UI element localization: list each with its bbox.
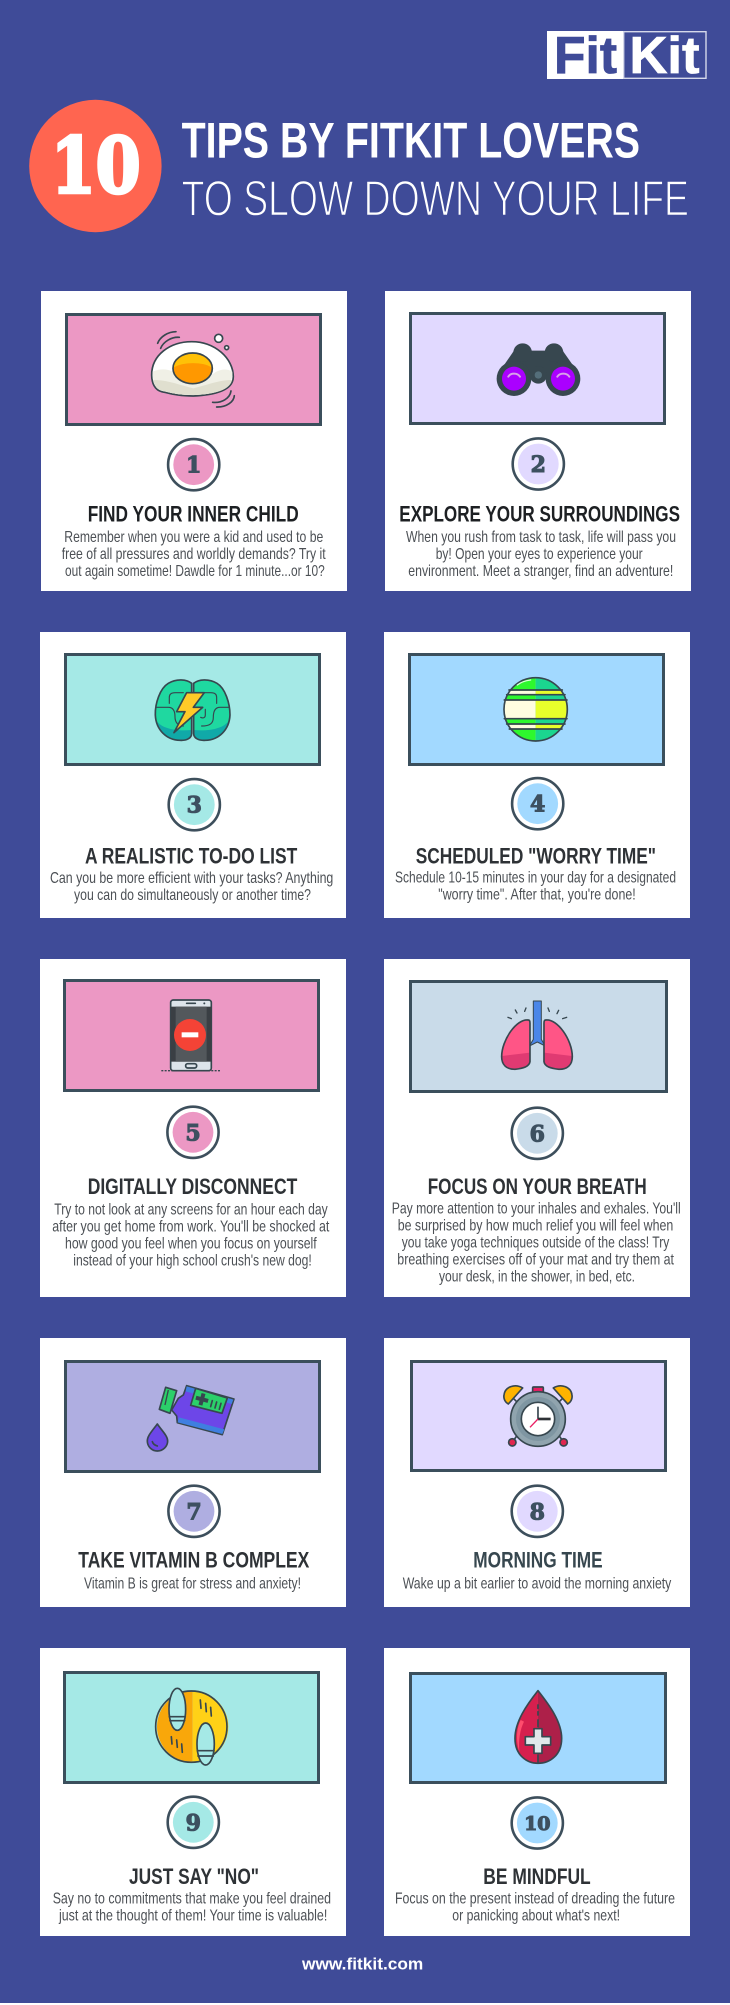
body text xyxy=(395,1890,675,1924)
badge: number 10: 10 xyxy=(51,122,141,212)
badge: number 10 xyxy=(29,100,162,232)
heading: BE MINDFUL xyxy=(483,1864,591,1889)
number badge 5 xyxy=(167,1107,219,1158)
heading: DIGITALLY DISCONNECT xyxy=(88,1174,298,1199)
number badge 2: 2 xyxy=(531,452,546,478)
panel: tip 5 digitally disconnect xyxy=(40,959,346,1297)
body text xyxy=(406,529,676,580)
body text: out again sometime! Dawdle for 1 minute...or 10? xyxy=(65,563,325,580)
icon: striped ball xyxy=(504,677,568,741)
panel: tip 6 focus on your breath xyxy=(384,959,690,1297)
number badge 7 xyxy=(168,1486,220,1537)
body text xyxy=(392,1200,681,1285)
number badge 8: 8 xyxy=(530,1499,545,1525)
body text xyxy=(395,869,676,903)
body text: you can do simultaneously or another time? xyxy=(74,887,311,904)
icon: lungs xyxy=(502,1001,572,1069)
number badge 10: 10 xyxy=(524,1813,551,1835)
heading: FIND YOUR INNER CHILD xyxy=(88,502,299,526)
heading: TAKE VITAMIN B COMPLEX xyxy=(78,1547,310,1572)
panel: tip 2 explore your surroundings xyxy=(385,291,691,591)
number badge 7: 7 xyxy=(186,1499,202,1525)
body text xyxy=(62,529,326,580)
body text: Vitamin B is great for stress and anxiety! xyxy=(84,1575,301,1592)
body text: your desk, in the shower, in bed, etc. xyxy=(439,1268,635,1285)
number badge 4 xyxy=(512,778,563,829)
number badge 5: 5 xyxy=(185,1120,201,1146)
heading: SCHEDULED "WORRY TIME" xyxy=(416,843,656,868)
body text: Say no to commitments that make you feel drained xyxy=(53,1890,331,1907)
number badge 3: 3 xyxy=(187,793,202,819)
body text: just at the thought of them! Your time is valuable! xyxy=(58,1907,327,1924)
icon: brain with lightning bolt xyxy=(155,680,230,740)
number badge 3 xyxy=(169,779,220,830)
icon: smartphone with no-entry sign xyxy=(161,1000,221,1071)
number badge 4: 4 xyxy=(530,792,545,818)
panel: tip 1 find your inner child xyxy=(41,291,347,591)
panel: tip 8 morning time xyxy=(384,1338,690,1607)
body text: "worry time". After that, you're done! xyxy=(438,886,636,903)
heading: A REALISTIC TO-DO LIST xyxy=(85,843,298,868)
heading: MORNING TIME xyxy=(473,1547,603,1572)
body text: free of all pressures and worldly demands? Try it xyxy=(62,546,326,563)
number badge 6: 6 xyxy=(530,1121,545,1147)
icon: alarm clock xyxy=(504,1386,572,1446)
body text: or panicking about what's next! xyxy=(452,1907,620,1924)
icon: binoculars xyxy=(497,343,580,396)
heading: JUST SAY "NO" xyxy=(129,1864,259,1889)
number badge 1 xyxy=(168,439,219,490)
number badge 8 xyxy=(512,1486,563,1537)
logo: FitKit: Kit xyxy=(630,27,700,85)
icon: footprints on circle xyxy=(156,1688,228,1765)
number badge 6 xyxy=(512,1108,563,1159)
icon: blood drop with cross xyxy=(515,1691,562,1763)
body text: Try to not look at any screens for an hour each day xyxy=(54,1201,328,1218)
panel: tip 7 take vitamin b complex xyxy=(40,1338,346,1607)
body text: instead of your high school crush's new dog! xyxy=(73,1252,312,1269)
body text xyxy=(52,1201,330,1269)
heading: FOCUS ON YOUR BREATH xyxy=(428,1174,647,1199)
number badge 1: 1 xyxy=(186,453,201,479)
number badge 2 xyxy=(513,438,564,490)
number badge 9 xyxy=(168,1797,219,1848)
logo: FitKit: Fit xyxy=(554,27,617,85)
footer url: www.fitkit.com xyxy=(301,1954,423,1973)
panel: tip 10 be mindful xyxy=(384,1648,690,1936)
logo: FitKit xyxy=(547,27,706,85)
body text: by! Open your eyes to experience your xyxy=(436,546,643,563)
panel: tip 9 just say no xyxy=(40,1648,346,1936)
body text xyxy=(53,1890,331,1924)
body text xyxy=(50,870,333,904)
body text: how good you feel when you focus on yourself xyxy=(65,1235,317,1252)
number badge 10 xyxy=(512,1797,563,1849)
icon: vitamin bottle and drop xyxy=(147,1386,234,1451)
panel: tip 3 a realistic to-do list xyxy=(40,632,346,918)
icon: fried egg xyxy=(152,332,234,407)
body text: Remember when you were a kid and used to be xyxy=(64,529,323,546)
panel: tip 4 scheduled worry time xyxy=(384,632,690,918)
title xyxy=(182,112,689,227)
body text: after you get home from work. You'll be shocked at xyxy=(52,1218,330,1235)
body text: Can you be more efficient with your tasks? Anything xyxy=(50,870,333,887)
number badge 9: 9 xyxy=(186,1810,201,1836)
